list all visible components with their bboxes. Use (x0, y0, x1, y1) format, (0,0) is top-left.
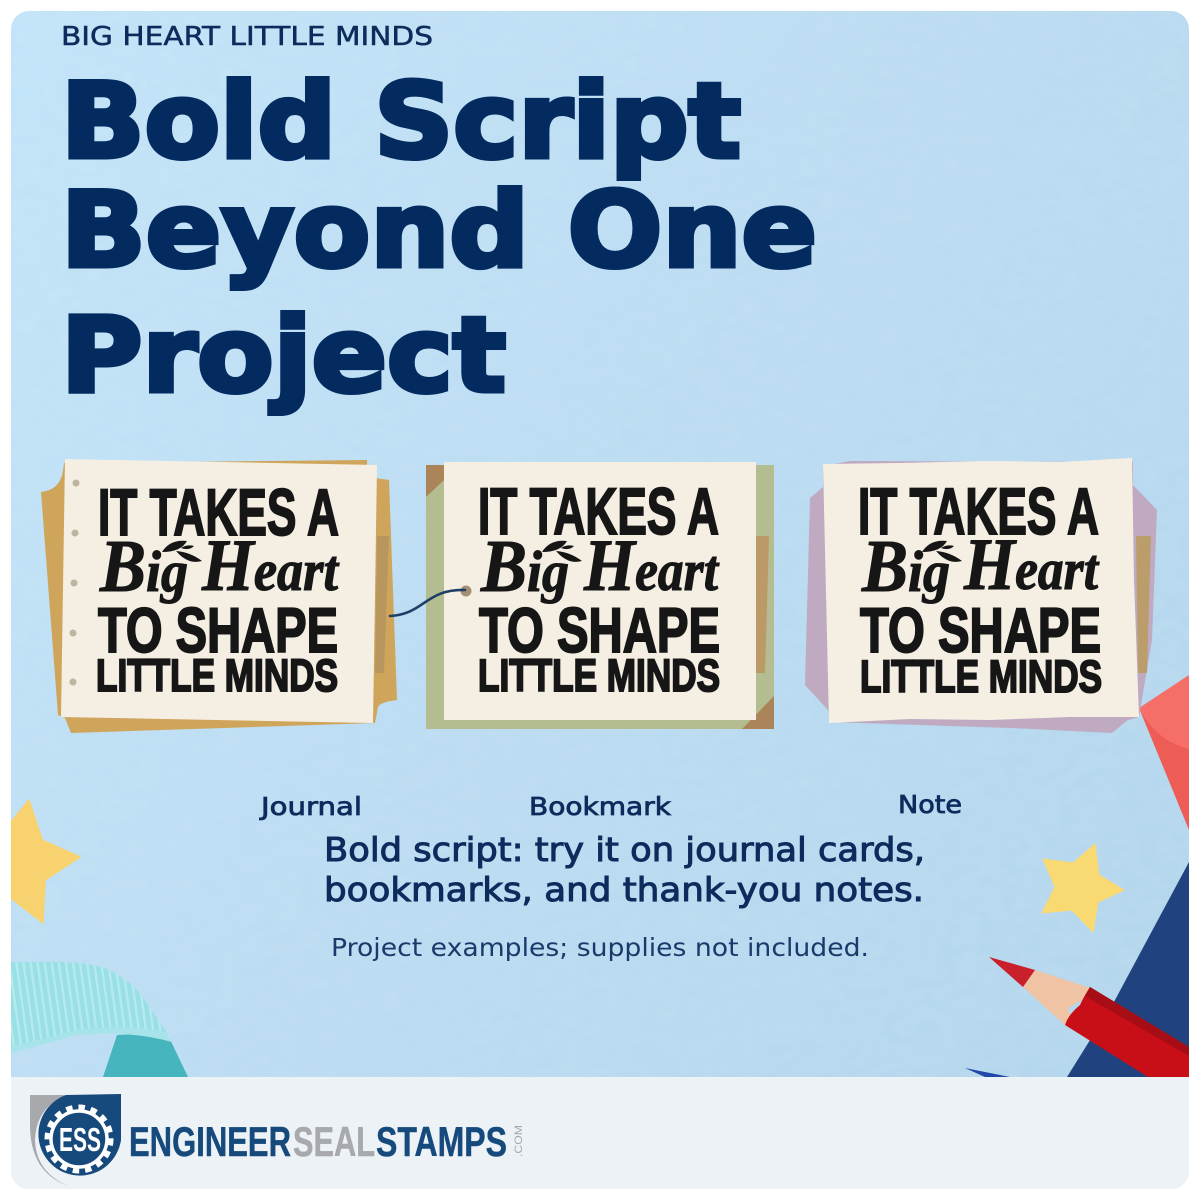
icon: blue paper (1067, 862, 1189, 1077)
note stamp artwork: LITTLE MINDS (860, 651, 1102, 702)
icon: red envelope (1139, 675, 1189, 830)
logo shield: ESS (59, 1121, 101, 1158)
note stamp artwork: TO SHAPE (860, 596, 1101, 666)
note stamp artwork (858, 474, 1102, 702)
note stamp artwork: Big (861, 526, 950, 608)
journal stamp artwork: IT TAKES A (98, 475, 339, 549)
kicker: BIG HEART LITTLE MINDS (61, 22, 433, 52)
bookmark stamp artwork: TO SHAPE (479, 596, 720, 666)
label: bookmark: Bookmark (529, 792, 672, 821)
connector cord (390, 586, 472, 616)
journal stamp artwork: LITTLE MINDS (96, 650, 338, 701)
panel: journal card (41, 459, 397, 733)
note tape (1136, 536, 1151, 673)
title (61, 62, 817, 416)
bookmark stamp artwork: Big (480, 526, 569, 608)
panel: bookmark card (426, 462, 774, 729)
note paper (823, 458, 1139, 723)
icon: left star (11, 800, 80, 923)
journal backing (41, 460, 397, 733)
icon: ribbon (11, 962, 188, 1077)
title: Bold Script (61, 62, 741, 182)
logo wordmark (129, 1118, 507, 1165)
journal stamp artwork: Big (99, 526, 188, 608)
body text: Bold script: try it on journal cards, (324, 830, 925, 869)
bookmark corners (426, 465, 774, 729)
journal paper (61, 459, 377, 723)
panel: note card (805, 458, 1157, 733)
logo shield (30, 1094, 121, 1186)
journal stamp artwork (96, 475, 340, 701)
icon: right star (1042, 844, 1124, 932)
body text: bookmarks, and thank-you notes. (324, 870, 924, 909)
journal tape (375, 536, 389, 673)
footer band (11, 1077, 1189, 1189)
note backing (805, 461, 1157, 733)
note stamp artwork: Heart (963, 524, 1100, 606)
logo wordmark: SEAL (293, 1118, 375, 1165)
bookmark stamp artwork: Heart (583, 525, 720, 607)
icon: red pencil (989, 957, 1189, 1077)
label: journal: Journal (259, 792, 362, 821)
logo wordmark: ENGINEER (129, 1118, 291, 1165)
bookmark stamp artwork (478, 474, 720, 701)
logo wordmark: STAMPS (376, 1118, 507, 1165)
bookmark backing (426, 465, 774, 729)
body text (324, 830, 925, 909)
label: note: Note (898, 790, 962, 819)
logo (30, 1094, 525, 1186)
title: Project (61, 296, 506, 416)
bookmark paper (444, 462, 756, 720)
bookmark stamp artwork: LITTLE MINDS (478, 650, 720, 701)
labels (259, 790, 962, 821)
bookmark tape (756, 536, 769, 673)
journal stamp artwork: Heart (201, 525, 340, 607)
journal holes (70, 480, 80, 686)
icon: blue pencil tip (965, 1068, 1010, 1077)
bookmark stamp artwork: IT TAKES A (478, 474, 719, 548)
title: Beyond One (61, 171, 817, 291)
logo .com: .COM (513, 1125, 525, 1157)
journal stamp artwork: TO SHAPE (98, 596, 338, 666)
disclaimer: Project examples; supplies not included. (331, 933, 869, 962)
